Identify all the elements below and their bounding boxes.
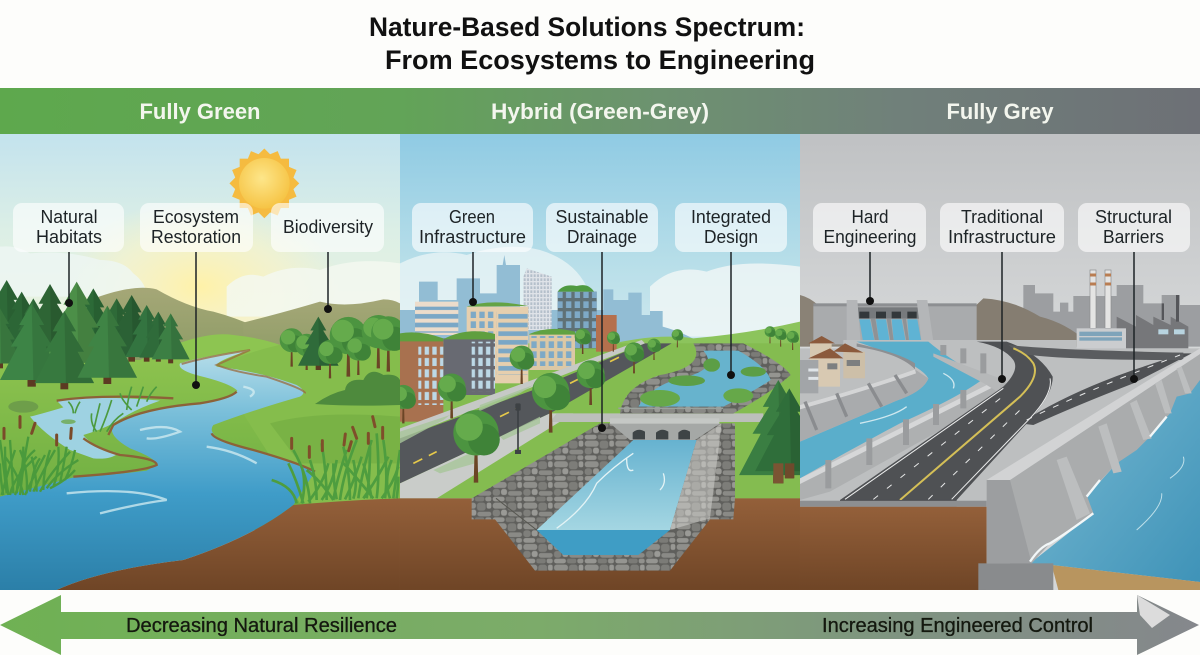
street trees xyxy=(391,326,799,433)
label: Ecosystem Restoration xyxy=(140,203,253,389)
river xyxy=(800,342,984,478)
label: Structural Barriers: Barriers xyxy=(1103,227,1164,247)
pond plants xyxy=(68,387,157,432)
label: Green Infrastructure: Green xyxy=(449,207,495,227)
sea xyxy=(1030,363,1200,582)
reeds: bottom right xyxy=(272,433,400,503)
road with pavements xyxy=(400,340,672,498)
label: Sustainable Drainage: Sustainable xyxy=(556,207,648,227)
transverse walkway xyxy=(550,413,763,422)
label: Hard Engineering xyxy=(813,203,926,305)
arrow: spectrum double-headed arrow xyxy=(0,595,1199,655)
panel: hybrid xyxy=(391,130,824,590)
label: Traditional Infrastructure: Traditional xyxy=(961,207,1043,227)
buildings xyxy=(400,268,617,422)
stone channel xyxy=(472,423,735,571)
scene: city with sustainable drainage xyxy=(391,130,824,590)
arrow: spectrum double-headed arrow: Increasing Engineered Control xyxy=(822,615,1093,637)
title xyxy=(369,12,815,75)
label: Structural Barriers: Structural xyxy=(1095,207,1172,227)
scene: hard engineering xyxy=(800,130,1200,590)
lower river wall xyxy=(800,345,1007,500)
pines xyxy=(739,380,800,484)
lagoon xyxy=(30,398,160,459)
arrow: spectrum double-headed arrow: Decreasing Natural Resilience xyxy=(126,615,397,637)
title: From Ecosystems to Engineering xyxy=(385,45,815,75)
scene: natural river landscape xyxy=(0,130,407,590)
houses xyxy=(800,336,865,393)
skyline xyxy=(1023,285,1200,347)
sand xyxy=(1052,565,1200,590)
seawall barrier xyxy=(978,348,1200,590)
factory xyxy=(1077,270,1188,349)
lamp post xyxy=(515,403,521,454)
panel: fully green xyxy=(0,130,407,590)
soil xyxy=(800,507,987,590)
bush xyxy=(315,372,400,406)
label: Structural Barriers xyxy=(1078,203,1190,383)
label: Green Infrastructure: Infrastructure xyxy=(419,227,526,247)
label: Natural Habitats: Habitats xyxy=(36,227,102,247)
ground xyxy=(800,348,1200,501)
reeds: bottom left xyxy=(0,437,78,495)
label: Traditional Infrastructure: Infrastructure xyxy=(948,227,1056,247)
upper pond xyxy=(620,343,791,413)
label: Sustainable Drainage: Drainage xyxy=(567,227,637,247)
label: Green Infrastructure xyxy=(412,203,533,306)
icon: sun xyxy=(229,148,299,218)
soil xyxy=(400,498,800,590)
soil xyxy=(57,498,400,590)
skyline xyxy=(400,255,700,343)
deciduous trees xyxy=(280,315,407,378)
river xyxy=(0,350,315,590)
label: Hard Engineering: Hard xyxy=(852,207,888,227)
label: Integrated Design xyxy=(675,203,787,379)
label: Integrated Design: Integrated xyxy=(691,207,771,227)
label: Natural Habitats: Natural xyxy=(40,207,98,227)
label: Hard Engineering: Engineering xyxy=(824,227,916,247)
header band: Hybrid (Green-Grey) xyxy=(491,99,709,124)
header band xyxy=(0,88,1200,134)
label: Biodiversity xyxy=(271,203,384,313)
label: Biodiversity: Biodiversity xyxy=(283,217,373,237)
forest xyxy=(0,280,190,389)
header band: Fully Green xyxy=(140,99,260,124)
dam xyxy=(813,300,977,346)
label: Ecosystem Restoration: Restoration xyxy=(151,227,241,247)
left retaining wall xyxy=(800,369,928,442)
hills xyxy=(800,295,845,347)
panel: fully grey xyxy=(800,130,1200,590)
label: Ecosystem Restoration: Ecosystem xyxy=(153,207,239,227)
label: Sustainable Drainage xyxy=(546,203,658,432)
label: Traditional Infrastructure xyxy=(940,203,1064,383)
bridge xyxy=(610,418,720,440)
label: Integrated Design: Design xyxy=(704,227,758,247)
big foreground tree xyxy=(453,410,500,483)
highway xyxy=(840,342,1192,507)
title: Nature-Based Solutions Spectrum: xyxy=(369,12,805,42)
label: Natural Habitats xyxy=(13,203,124,307)
header band: Fully Grey xyxy=(946,99,1054,124)
